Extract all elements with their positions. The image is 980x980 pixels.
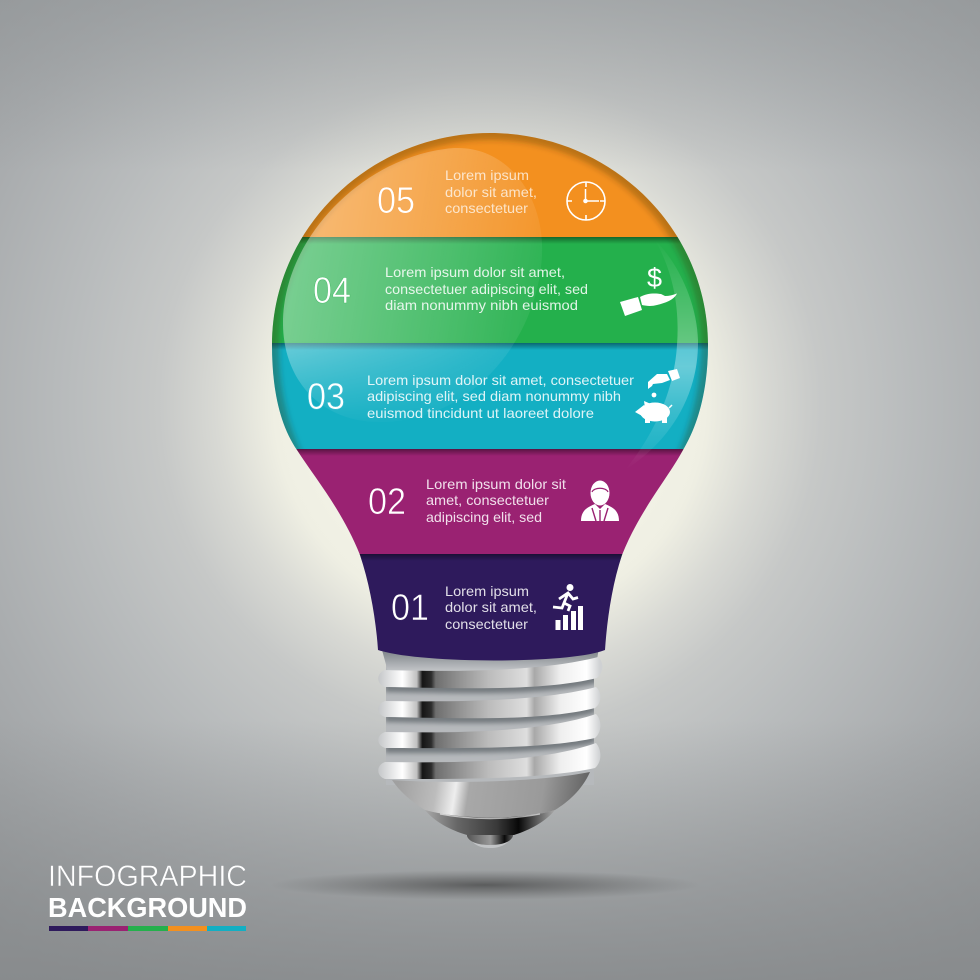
- color legend bar: [49, 926, 246, 931]
- text 03: adipiscing elit, sed diam nonummy nibh: [367, 388, 621, 404]
- cone: [392, 772, 590, 818]
- glass highlight left: [283, 148, 542, 422]
- segment 05 orange: [302, 133, 678, 237]
- text 01: Lorem ipsum: [445, 583, 529, 599]
- socket body: [386, 645, 594, 785]
- text 02: [426, 476, 566, 525]
- bulb glass: [260, 130, 720, 664]
- segment 03 teal: [260, 343, 720, 449]
- segment 04 green: [260, 237, 720, 343]
- seam shadow 03: [272, 343, 708, 350]
- cap: [425, 810, 555, 835]
- item 04: [313, 263, 677, 316]
- heading line 1: INFOGRAPHIC: [48, 860, 247, 893]
- text 01: consectetuer: [445, 616, 528, 632]
- text 02: amet, consectetuer: [426, 492, 549, 508]
- rim shading: [272, 133, 708, 460]
- text 03: Lorem ipsum dolor sit amet, consectetuer: [367, 372, 634, 388]
- text 04: diam nonummy nibh euismod: [385, 297, 578, 313]
- thread 3: [378, 714, 600, 748]
- background top shade: [0, 0, 980, 170]
- icon: coin into piggy bank: [635, 369, 680, 423]
- heading line 2: BACKGROUND: [48, 892, 247, 923]
- floor shadow: [270, 870, 700, 900]
- seam shadow 04: [299, 237, 680, 243]
- glass highlight right: [636, 254, 698, 456]
- icon: hand with dollar: $: [647, 263, 662, 293]
- tip pale underside: [470, 838, 511, 848]
- text 04: consectetuer adipiscing elit, sed: [385, 281, 588, 297]
- item 05: [377, 167, 605, 221]
- text 05: dolor sit amet,: [445, 184, 537, 200]
- text 02: adipiscing elit, sed: [426, 509, 542, 525]
- text 01: [445, 583, 537, 632]
- thread shadows: [386, 678, 594, 756]
- tip: [467, 830, 513, 845]
- number 03: 03: [307, 376, 345, 417]
- number 04: 04: [313, 270, 351, 311]
- lamp base: [378, 640, 602, 848]
- item 01: [391, 583, 583, 632]
- thread 2: [378, 687, 600, 718]
- icon: hand with dollar: [620, 263, 677, 316]
- number 05: 05: [377, 180, 415, 221]
- seam shadow 02: [296, 449, 684, 455]
- text 03: euismod tincidunt ut laoreet dolore: [367, 405, 594, 421]
- background lower shade: [0, 720, 980, 980]
- thread 1: [378, 657, 602, 688]
- seam shadow 01: [360, 554, 622, 560]
- item 02: [368, 476, 619, 525]
- text 04: [385, 264, 588, 313]
- text 05: [445, 167, 537, 216]
- segment 01 purple: [360, 554, 622, 660]
- text 05: consectetuer: [445, 200, 528, 216]
- thread 4: [378, 743, 600, 779]
- logo title: [48, 860, 247, 931]
- number 02: 02: [368, 481, 406, 522]
- text 02: Lorem ipsum dolor sit: [426, 476, 566, 492]
- text 01: dolor sit amet,: [445, 599, 537, 615]
- socket neck: [382, 640, 600, 673]
- number 01: 01: [391, 587, 429, 628]
- cone highlight line: [440, 814, 540, 818]
- text 03: [367, 372, 634, 421]
- icon: clock: [567, 182, 605, 220]
- segment 02 magenta: [296, 449, 684, 554]
- icon: runner on bars: [553, 584, 583, 630]
- text 04: Lorem ipsum dolor sit amet,: [385, 264, 565, 280]
- icon: businessman: [581, 480, 619, 521]
- text 05: Lorem ipsum: [445, 167, 529, 183]
- item 03: [307, 369, 680, 423]
